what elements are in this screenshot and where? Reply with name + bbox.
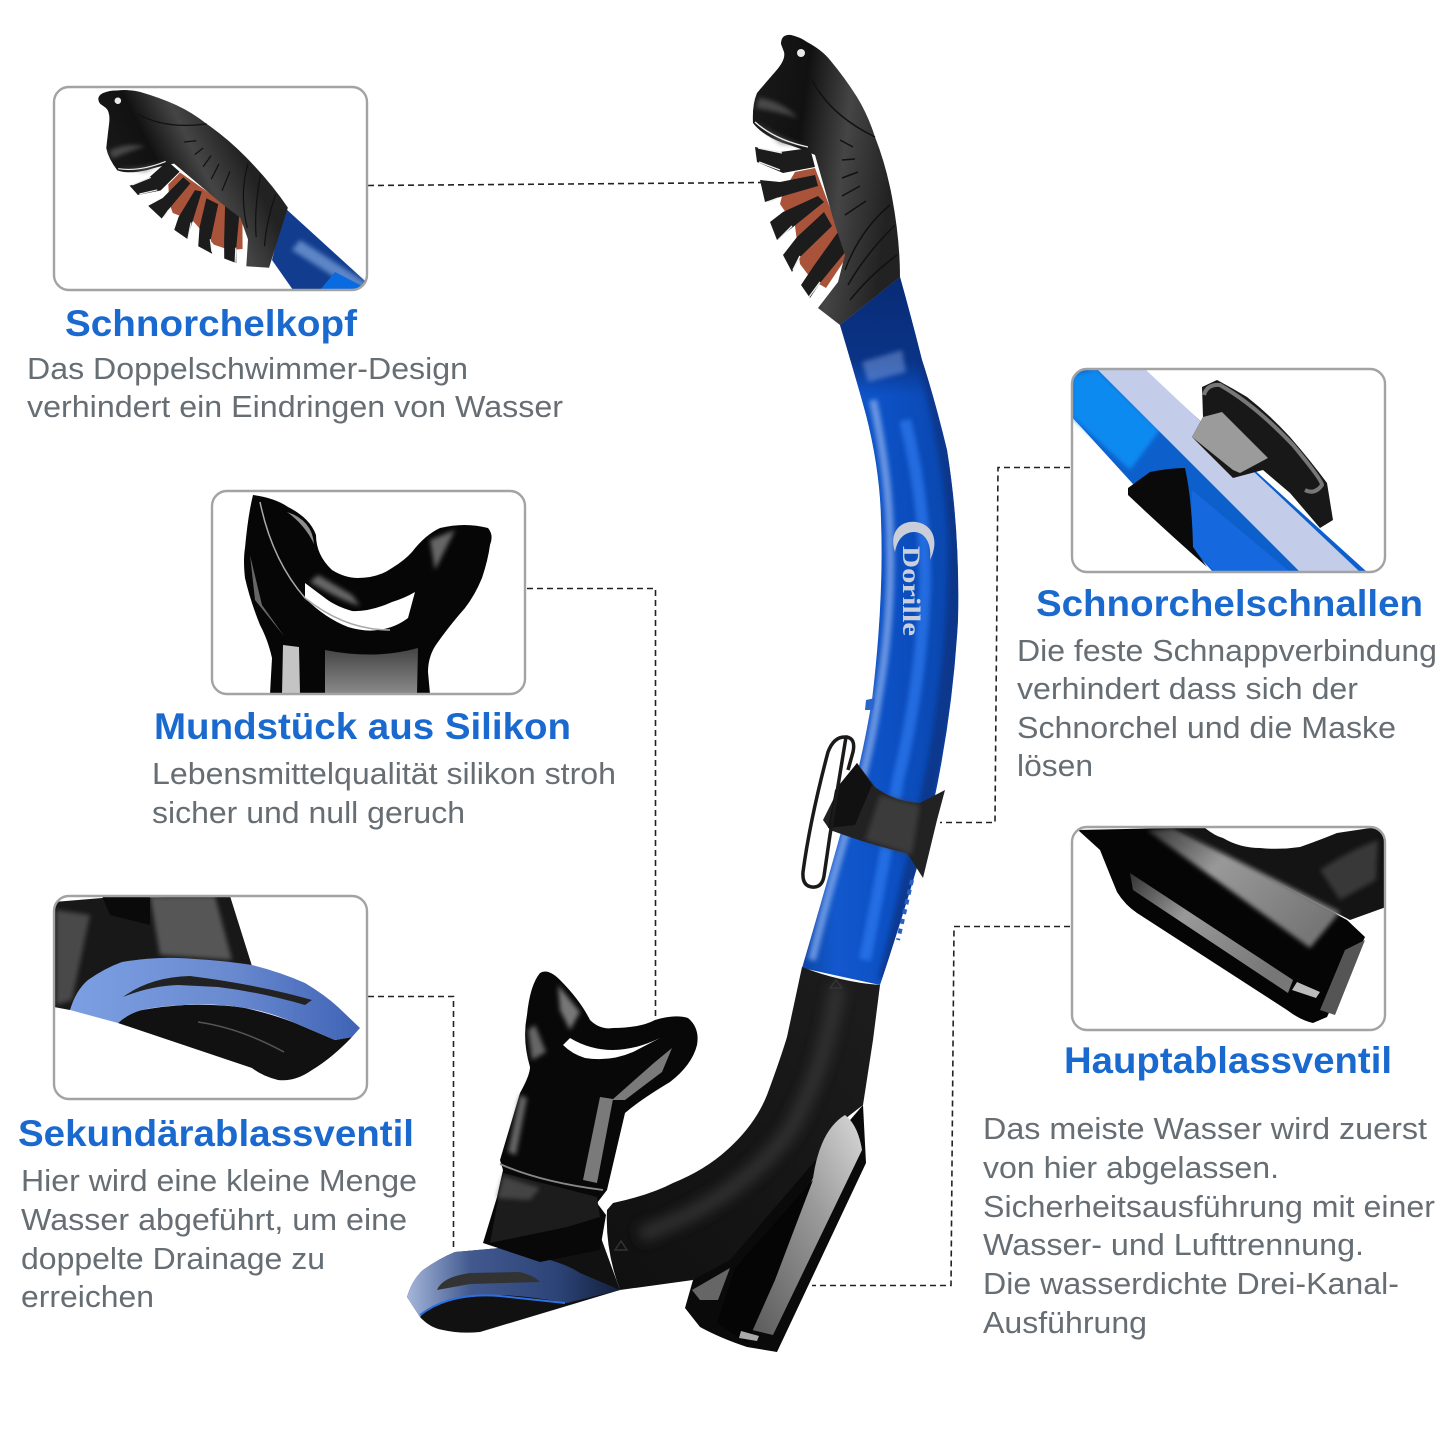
section: Mundstück: Lebensmittelqualität silikon stroh [152,756,616,791]
connector: Sekundärablassventil [368,996,454,1250]
brand logo on tube [893,522,934,636]
connector: Mundstück [527,588,656,1017]
section: Hauptablassventil: Hauptablassventil [1064,1040,1392,1081]
section: Mundstück [152,706,616,830]
section: Hauptablassventil: Sicherheitsausführung mit einer [983,1189,1435,1224]
section: Hauptablassventil: Wasser- und Lufttrennung. [983,1227,1364,1262]
drain foot [685,1105,866,1352]
section: Schnorchelkopf [27,303,563,424]
section: Schnorchelschnallen: verhindert dass sich der [1017,671,1358,706]
section: Sekundärablassventil: erreichen [21,1279,154,1314]
section: Sekundärablassventil: Sekundärablassventil [18,1113,414,1154]
connector: Hauptablassventil [812,926,1070,1286]
brand logo on tube: Dorille [897,546,924,636]
panel: Sekundärablassventil photo [54,896,367,1099]
section: Schnorchelschnallen: Schnorchelschnallen [1036,583,1423,624]
section: Schnorchelkopf: verhindert ein Eindringen von Wasser [27,389,563,424]
purge nose [407,1235,620,1333]
mouthpiece [483,972,698,1262]
section: Schnorchelschnallen: Schnorchel und die Maske [1017,710,1396,745]
section: Schnorchelschnallen: lösen [1017,748,1093,783]
section: Hauptablassventil: Die wasserdichte Drei-Kanal- [983,1266,1399,1301]
snorkel tube [802,277,958,985]
panel: Schnorchelschnallen photo [1072,369,1385,572]
section: Schnorchelschnallen [1017,583,1437,783]
snorkel head with splash guard [753,35,900,325]
section: Hauptablassventil [983,1040,1435,1340]
section: Mundstück: sicher und null geruch [152,795,465,830]
panel: Schnorchelkopf photo [52,86,368,292]
section: Sekundärablassventil: Wasser abgeführt, um eine [21,1202,407,1237]
connector: Schnorchelschnallen [940,468,1070,822]
section: Sekundärablassventil: Hier wird eine kleine Menge [21,1163,417,1198]
panel: Hauptablassventil photo [1072,827,1386,1030]
section: Hauptablassventil: von hier abgelassen. [983,1150,1279,1185]
collar and lower tube [607,967,880,1290]
section: Mundstück: Mundstück aus Silikon [154,706,571,747]
section: Schnorchelkopf: Schnorchelkopf [65,303,358,344]
section: Sekundärablassventil [18,1113,417,1314]
connector: Schnorchelkopf [368,182,765,186]
section: Schnorchelkopf: Das Doppelschwimmer-Design [27,351,468,386]
section: Hauptablassventil: Ausführung [983,1305,1147,1340]
panel: Mundstück photo [212,491,525,694]
section: Sekundärablassventil: doppelte Drainage zu [21,1241,325,1276]
section: Schnorchelschnallen: Die feste Schnappverbindung [1017,633,1437,668]
tube clip [803,737,945,887]
section: Hauptablassventil: Das meiste Wasser wird zuerst [983,1111,1427,1146]
illustration: snorkel [407,35,970,1352]
